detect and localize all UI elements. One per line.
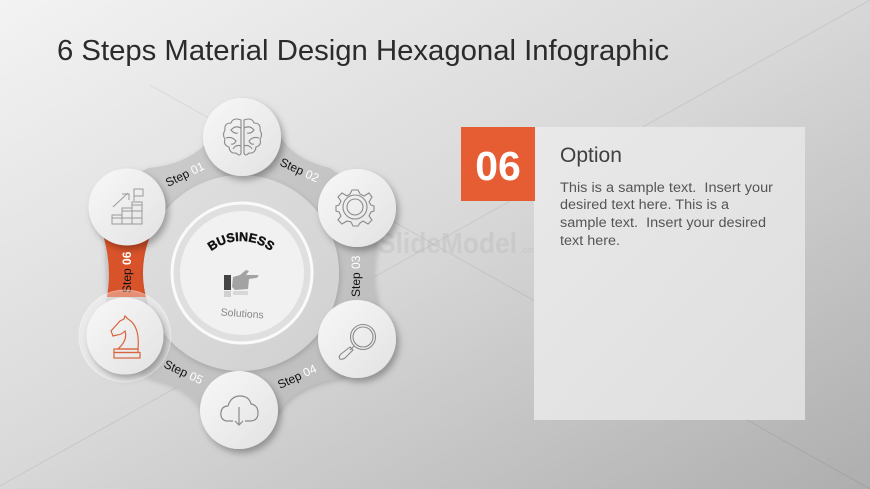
center hub [170,202,314,344]
icon: stairs and flag [112,189,143,224]
option heading: Option [560,144,622,167]
connector: step 06 orange [104,238,153,297]
step 02 label: Step 02 [278,155,321,185]
node 2: gear [318,169,396,247]
node 4: cloud [200,371,278,449]
title: 6 Steps Material Design Hexagonal Infographic [57,35,669,67]
connector band [100,120,378,440]
node 6: stairs [88,168,166,246]
number badge: 06 [475,143,521,189]
icon: gear [336,190,374,226]
icon: brain [224,119,262,155]
body text: sample text. Insert your desired [560,215,766,230]
icon: magnifier [339,324,376,359]
step 04 label: Step 04 [275,361,319,392]
hexagonal ring diagram [78,98,402,456]
step 05 label: Step 05 [162,357,205,387]
inner disc [143,175,339,371]
icon: chess knight [111,316,140,358]
body text: desired text here. This is a [560,197,730,212]
step 03 label: Step 03 [349,255,363,297]
body text [560,180,774,248]
body text: text here. [560,233,620,248]
panel: option text [461,127,805,420]
solutions label: Solutions [220,307,264,321]
step 06 label: Step 06 [120,251,134,293]
step labels [120,155,363,392]
body text: This is a sample text. Insert your [560,180,774,195]
node 3: magnifier [318,300,396,378]
number badge [461,127,535,201]
icon: pointing hand [224,270,258,297]
icon: cloud download [221,396,258,425]
step 01 label: Step 01 [163,159,207,190]
node 1: brain [203,98,281,176]
node 5: active chess knight [79,290,171,382]
business label: BUSINESS [206,232,274,251]
watermark: SlideModel.com [378,228,540,260]
